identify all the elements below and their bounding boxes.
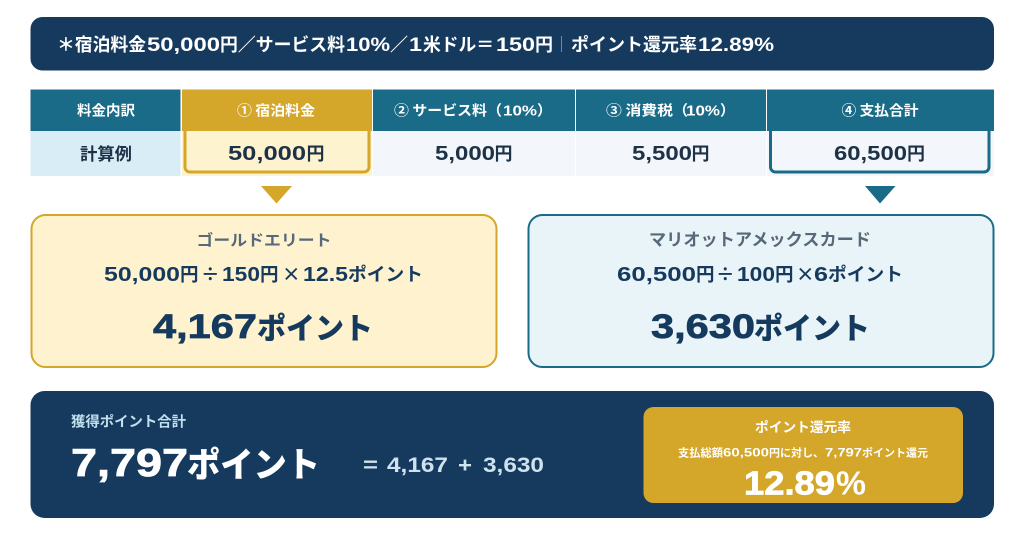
formula: marriott amex card: ×: [796, 261, 815, 287]
heading: marriott amex card: マリオットアメックスカード: [649, 226, 871, 250]
header cell: consumption tax: ）: [720, 100, 735, 120]
heading: gold elite: ゴールドエリート: [196, 228, 332, 250]
points: marriott amex card: [651, 304, 870, 348]
points: marriott amex card: 3,630: [651, 308, 755, 346]
top banner: 1: [409, 34, 422, 56]
top banner: 12.89%: [698, 34, 774, 56]
fee breakdown table: [30, 90, 994, 176]
formula: marriott amex card: [617, 261, 903, 287]
top banner: ／: [390, 31, 408, 57]
heading: total points: 獲得ポイント合計: [71, 410, 187, 432]
value cell: 5,500 yen: 5,500: [632, 143, 692, 165]
top banner: ＊宿泊料金: [57, 31, 146, 57]
top banner: 円／サービス料: [220, 31, 345, 57]
value cell: 50,000 yen highlighted: 円: [306, 140, 324, 166]
top banner: [30, 17, 994, 70]
total value: ポイント: [187, 437, 320, 487]
total value: 7,797: [71, 442, 188, 485]
top banner: 円: [535, 31, 553, 57]
header cell: consumption tax: ③ 消費税: [606, 100, 674, 120]
value cell: 5,000 yen: 円: [494, 140, 512, 166]
formula: marriott amex card: 6: [814, 263, 828, 286]
formula: gold elite: ÷: [201, 261, 220, 287]
formula: gold elite: 150: [222, 263, 260, 286]
formula: marriott amex card: ポイント: [828, 261, 903, 287]
formula: marriott amex card: ÷: [716, 261, 735, 287]
callout: return rate: 60,500: [723, 446, 769, 460]
total value: [71, 437, 320, 487]
header cell: label: [30, 90, 180, 131]
formula: gold elite: 50,000: [104, 263, 180, 286]
header cell: service charge: ）: [537, 100, 552, 120]
formula: marriott amex card: 100: [737, 263, 775, 286]
header cell: service charge: 10%: [503, 102, 537, 120]
value cell: 60,500 yen highlighted: [767, 131, 994, 176]
callout: return rate: 12.89: [744, 464, 835, 502]
header cell: label: 料金内訳: [77, 100, 136, 120]
callout: return rate: [644, 407, 963, 503]
formula: marriott amex card: 円: [775, 261, 794, 287]
formula: gold elite: ×: [282, 261, 301, 287]
arrow: teal down: [865, 186, 896, 204]
points: gold elite: 4,167: [153, 308, 257, 346]
formula: marriott amex card: 60,500: [617, 263, 696, 286]
value cell: 60,500 yen highlighted: 60,500: [834, 143, 907, 165]
top banner: 150: [496, 34, 535, 56]
breakdown sum: 3,630: [483, 453, 544, 477]
value cell: 5,500 yen: 円: [692, 140, 710, 166]
formula: gold elite: ポイント: [348, 261, 423, 287]
header cell: service charge: ② サービス料: [394, 100, 488, 120]
breakdown sum: +: [458, 454, 472, 477]
value cell: 50,000 yen highlighted: [182, 131, 372, 176]
breakdown sum: 4,167: [387, 453, 448, 477]
formula: marriott amex card: 円: [696, 261, 715, 287]
value cell: 50,000 yen highlighted: 50,000: [228, 143, 306, 165]
row label: calculation example: 計算例: [80, 140, 132, 165]
header cell: total payment: ④ 支払合計: [842, 100, 919, 120]
top banner: 50,000: [147, 34, 220, 56]
callout: return rate: %: [836, 464, 866, 502]
callout: return rate: 円に対し、: [769, 444, 824, 460]
value cell: 60,500 yen highlighted: 円: [907, 140, 925, 166]
row label: calculation example: [30, 131, 180, 176]
formula: gold elite: 12.5: [303, 263, 348, 286]
header cell: total payment: [767, 90, 994, 131]
value cell: 5,000 yen: [373, 131, 575, 176]
top banner: 米ドル＝: [423, 31, 494, 57]
header cell: room charge: ① 宿泊料金: [237, 100, 316, 120]
header cell: service charge: （: [487, 100, 502, 120]
header cell: consumption tax: [576, 90, 766, 131]
callout: return rate: ポイント還元: [862, 444, 928, 460]
points: gold elite: ポイント: [257, 304, 373, 348]
callout: return rate: ポイント還元率: [755, 416, 851, 436]
points: gold elite: [153, 304, 373, 348]
top banner: ポイント還元率: [571, 31, 697, 57]
formula: gold elite: 円: [180, 261, 199, 287]
callout: return rate: 支払総額: [678, 444, 723, 460]
callout: return rate: 7,797: [825, 446, 862, 460]
arrow: gold down: [261, 186, 292, 204]
top banner: 10%: [346, 34, 390, 56]
header cell: service charge: [373, 90, 575, 131]
value cell: 5,500 yen: [576, 131, 766, 176]
formula: gold elite: 円: [260, 261, 279, 287]
points: marriott amex card: ポイント: [754, 304, 870, 348]
header cell: consumption tax: 10%: [686, 102, 720, 120]
header cell: consumption tax: （: [673, 100, 688, 120]
formula: gold elite: [104, 261, 423, 287]
breakdown sum: [363, 453, 544, 477]
panel: marriott amex card: [528, 215, 994, 367]
breakdown sum: =: [363, 454, 378, 477]
panel: total points: [30, 391, 994, 518]
value cell: 5,000 yen: 5,000: [435, 143, 495, 165]
header cell: room charge: [182, 90, 372, 131]
panel: gold elite: [32, 215, 496, 367]
